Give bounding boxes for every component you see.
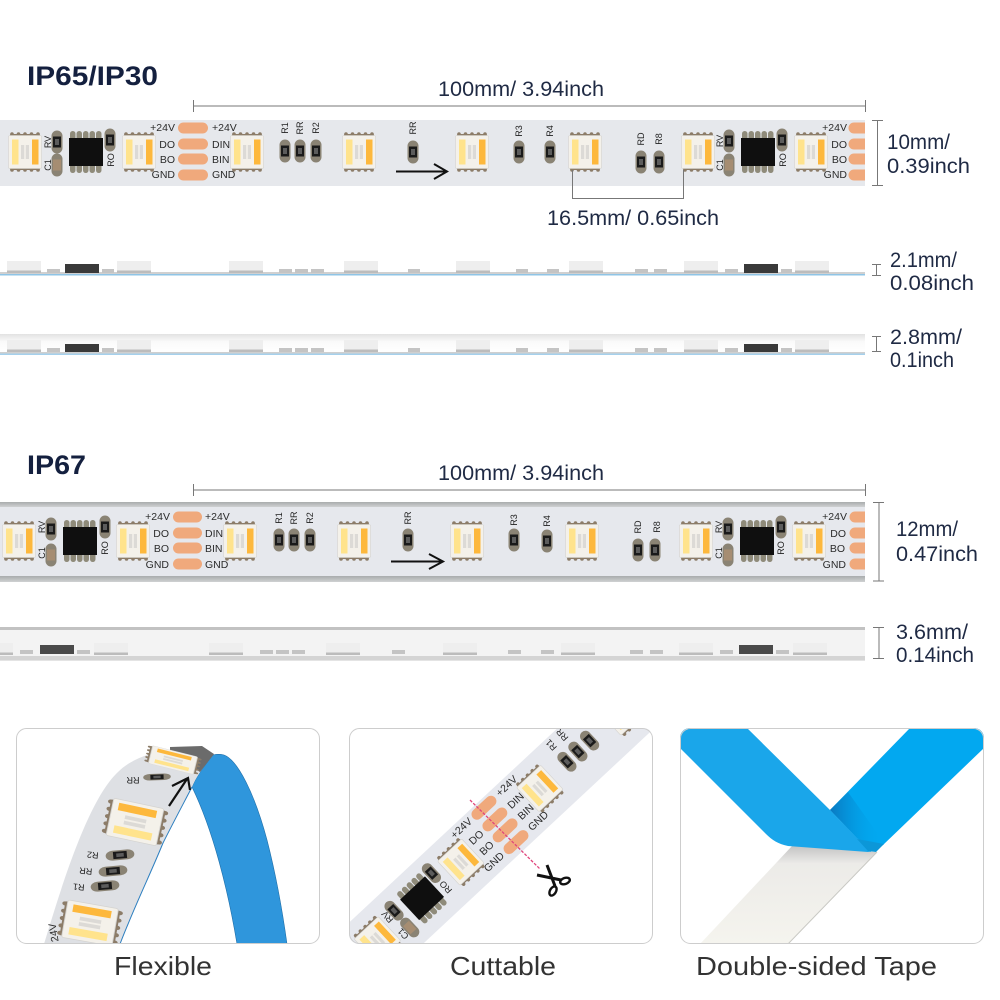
- strip 1 component labels: RO: [778, 153, 788, 167]
- rotated diagonal strip: DIN: [505, 790, 527, 812]
- direction arrow on bent strip: [169, 778, 190, 806]
- white liner tape: [700, 846, 877, 944]
- dimension: 2.1mm height: 0.08inch: [890, 272, 974, 295]
- dimension: 3.6mm height: 0.14inch: [896, 644, 974, 667]
- IP67 pad labels: GND: [823, 559, 846, 571]
- IP67 pad labels: +24V: [205, 511, 230, 523]
- dimension: 10mm width: [872, 120, 970, 186]
- rotated diagonal strip: GND: [526, 809, 551, 834]
- IP67 component labels: RO: [100, 541, 110, 555]
- IP67 component labels: R8: [652, 521, 662, 533]
- dimension: 16.5mm LED pitch: 16.5mm/ 0.65inch: [547, 207, 719, 230]
- fold shadow: [830, 792, 870, 852]
- dimension: 2.1mm height: 2.1mm/: [890, 249, 957, 272]
- strip 1 pad labels: DO: [831, 139, 847, 151]
- strip 1 pad labels: DIN: [212, 139, 230, 151]
- strip 1 component labels: [43, 121, 788, 171]
- dimension: 2.1mm height: [872, 249, 974, 295]
- strip 1 component labels: R1: [280, 122, 290, 134]
- rotated diagonal strip: [349, 728, 650, 944]
- strip 1 pad labels: GND: [152, 169, 175, 181]
- right blue band: [830, 728, 984, 852]
- strip 1 component labels: R4: [545, 125, 555, 137]
- strip 1 component labels: C1: [43, 159, 53, 171]
- dimension: strip 100mm length: [193, 78, 866, 112]
- bent strip front: RR: [78, 865, 93, 877]
- IP67 pad labels: BO: [154, 543, 169, 555]
- strip 1 LEDs: [8, 132, 828, 172]
- rotated diagonal strip: +24V: [449, 816, 475, 841]
- strip 1 pad labels: BO: [832, 154, 847, 166]
- IP67 direction arrow: [391, 554, 443, 569]
- strip 1 component labels: RV: [715, 135, 725, 147]
- IP67 pad labels: DO: [153, 528, 169, 540]
- side view components 2.8mm: [7, 340, 829, 352]
- IP67 component labels: RR: [289, 511, 299, 524]
- rotated diagonal strip: BIN: [516, 802, 537, 823]
- strip 1 direction arrow: [396, 164, 447, 179]
- heading: IP65/IP30: IP65/IP30: [27, 61, 158, 91]
- IP67 component labels: C1: [714, 547, 724, 559]
- strip 1 component labels: RR: [408, 121, 418, 134]
- rotated diagonal strip: +24V: [494, 773, 520, 799]
- dimension: IP67 100mm length: [193, 462, 866, 496]
- IP67 pad labels: [145, 511, 847, 571]
- IP67 pad labels: GND: [146, 559, 169, 571]
- IP67 component labels: R1: [274, 512, 284, 524]
- IP67 LEDs: [2, 521, 826, 561]
- strip 1 component labels: C1: [715, 159, 725, 171]
- IP67 pad labels: +24V: [145, 511, 170, 523]
- rotated diagonal strip: DO: [467, 828, 486, 848]
- side view components 3.6mm: [0, 643, 827, 655]
- panel: flexible: [16, 728, 320, 947]
- IP67 component labels: RO: [776, 541, 786, 555]
- LED strip top view: IP67: [0, 502, 865, 582]
- strip 1 pad labels: BIN: [212, 154, 230, 166]
- IP67 component labels: RV: [714, 521, 724, 533]
- strip 1 pad labels: +24V: [150, 122, 175, 134]
- dimension: IP67 100mm length: 100mm/ 3.94inch: [438, 462, 604, 485]
- dimension: 2.8mm height: 0.1inch: [890, 349, 954, 372]
- strip 1 component labels: R8: [654, 133, 664, 145]
- rotated diagonal strip: RO: [438, 879, 454, 895]
- dimension: 12mm width: 12mm/: [896, 518, 958, 541]
- strip 1 component labels: RD: [636, 132, 646, 146]
- bent strip front: 24V: [47, 922, 62, 943]
- strip 1 pad labels: GND: [212, 169, 236, 181]
- IP67 component labels: RD: [633, 520, 643, 534]
- dimension: 12mm width: [873, 502, 978, 581]
- left blue band: [680, 728, 877, 852]
- panel: cuttable: [349, 728, 653, 944]
- IP67 component labels: [37, 511, 786, 559]
- IP67 pad labels: BO: [830, 543, 845, 555]
- strip 1 pad labels: DO: [159, 139, 175, 151]
- caption: Flexible: Flexible: [114, 951, 212, 981]
- strip 1 resistors: [52, 128, 788, 176]
- strip 1 pad labels: GND: [824, 169, 847, 181]
- side view strip: 2.8mm: [0, 334, 865, 355]
- IP67 driver chips: [63, 520, 774, 562]
- IP67 pad labels: DIN: [205, 528, 223, 540]
- dimension: strip 100mm length: 100mm/ 3.94inch: [438, 78, 604, 101]
- IP67 solder pads: [173, 512, 865, 570]
- rotated diagonal strip: R1: [544, 737, 559, 753]
- IP67 component labels: R3: [509, 514, 519, 526]
- dimension: 2.8mm height: 2.8mm/: [890, 326, 962, 349]
- IP67 resistors: [46, 516, 786, 566]
- dimension: 10mm width: 0.39inch: [887, 155, 970, 178]
- IP67 pad labels: DO: [830, 528, 846, 540]
- caption: Double-sided Tape: Double-sided Tape: [696, 951, 937, 981]
- IP67 component labels: RR: [403, 511, 413, 524]
- side view strip: 2.1mm: [0, 261, 865, 276]
- strip 1 component labels: RO: [106, 153, 116, 167]
- icon: scissors: [537, 865, 571, 897]
- rotated diagonal strip: GND: [482, 850, 507, 875]
- dimension: 3.6mm height: 3.6mm/: [896, 621, 968, 644]
- rotated diagonal strip: BO: [477, 839, 497, 858]
- side view components 2.1mm: [7, 261, 829, 273]
- strip 1 component labels: RV: [43, 136, 53, 148]
- blue adhesive back of bent strip: [192, 754, 287, 944]
- side view strip: 3.6mm: [0, 627, 865, 661]
- IP67 component labels: R4: [542, 515, 552, 527]
- rotated diagonal strip: RV: [380, 909, 395, 925]
- dimension: 2.8mm height: [872, 326, 962, 372]
- panel: double-sided tape: [680, 728, 984, 944]
- LED strip top view: IP65/IP30: [0, 120, 865, 186]
- bent strip front: RR: [126, 775, 140, 785]
- bent strip front: [44, 744, 214, 947]
- rotated diagonal strip: C1: [396, 926, 411, 941]
- strip 1 pad labels: BO: [160, 154, 175, 166]
- strip 1 pad labels: [150, 122, 847, 181]
- caption: Cuttable: Cuttable: [450, 951, 556, 981]
- IP67 component labels: C1: [37, 547, 47, 559]
- IP67 pad labels: BIN: [205, 543, 223, 555]
- strip 1 solder pads: [178, 122, 865, 180]
- bent strip front: R2: [87, 850, 99, 860]
- strip 1 component labels: R2: [311, 122, 321, 134]
- dimension: 10mm width: 10mm/: [887, 131, 950, 154]
- bent strip front: R1: [73, 882, 85, 892]
- strip 1 driver chips: [69, 131, 775, 173]
- dimension: 16.5mm LED pitch: [547, 170, 719, 230]
- strip 1 component labels: RR: [295, 121, 305, 134]
- heading: IP67: IP67: [27, 450, 86, 480]
- IP67 pad labels: GND: [205, 559, 229, 571]
- dimension: 3.6mm height: [873, 621, 974, 667]
- strip 1 pad labels: +24V: [212, 122, 237, 134]
- strip 1 component labels: R3: [514, 125, 524, 137]
- rotated diagonal strip: RR: [554, 726, 570, 743]
- cut line: [470, 800, 540, 869]
- IP67 component labels: RV: [37, 521, 47, 533]
- IP67 pad labels: +24V: [822, 511, 847, 523]
- dimension: 12mm width: 0.47inch: [896, 543, 978, 566]
- IP67 component labels: R2: [305, 512, 315, 524]
- fold tip: [857, 839, 884, 852]
- strip 1 pad labels: +24V: [822, 122, 847, 134]
